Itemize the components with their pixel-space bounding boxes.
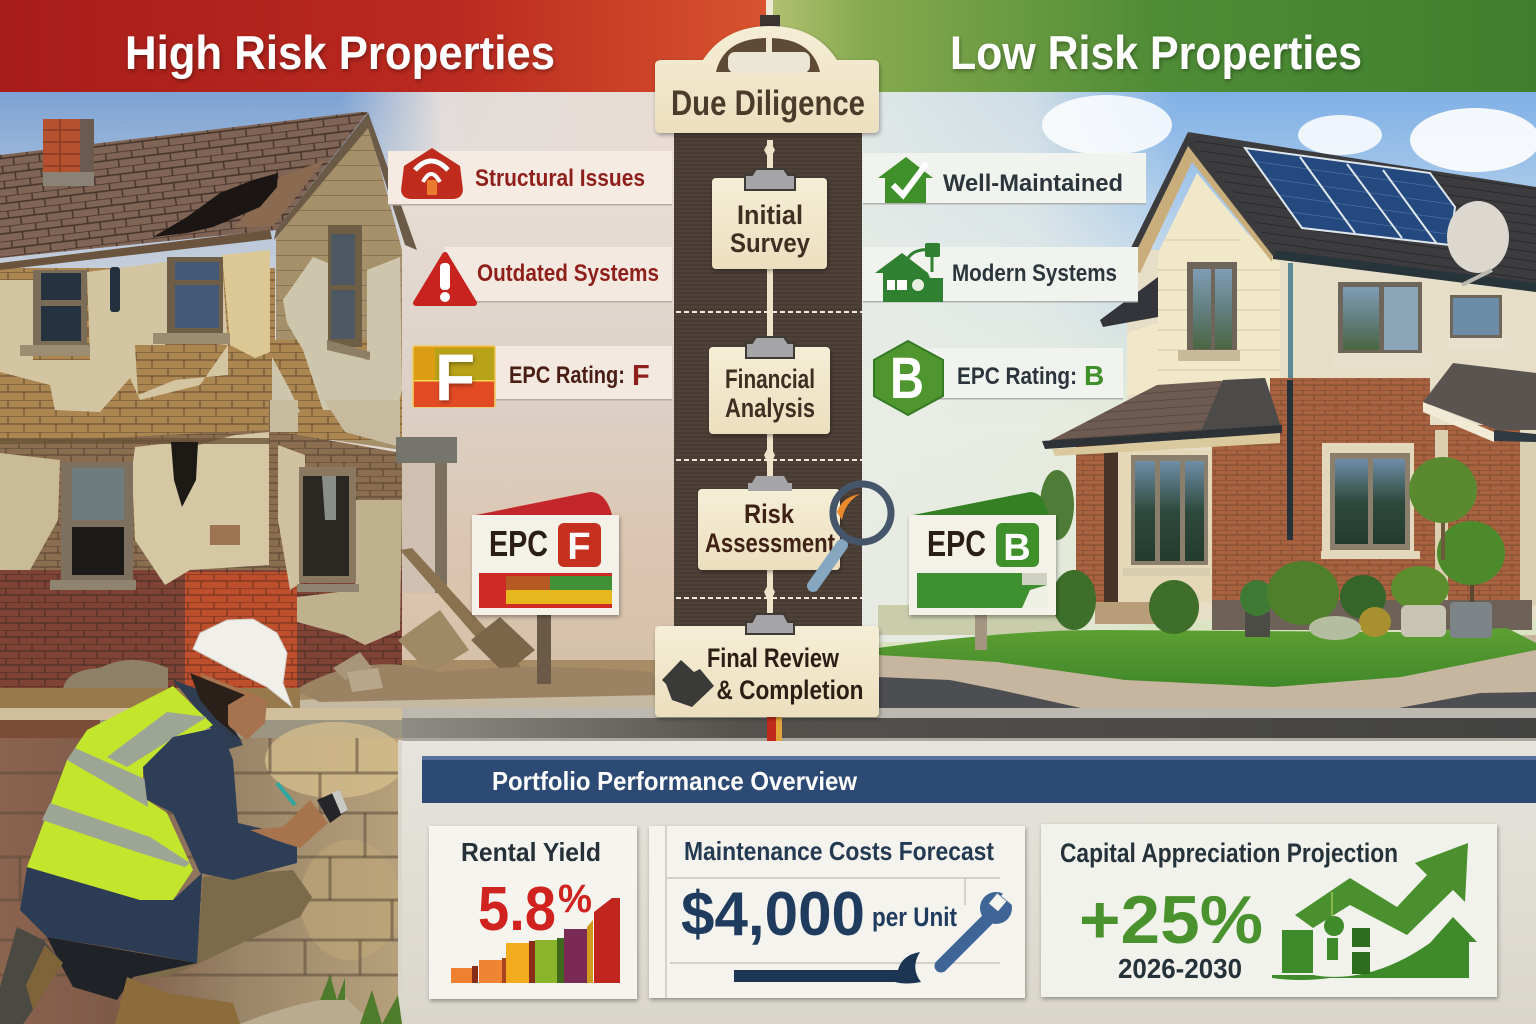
heading bar: Portfolio Performance Overview	[492, 766, 858, 796]
step: final review and completion	[655, 614, 879, 717]
step: risk assessment: Risk	[744, 499, 795, 529]
header: high risk: High Risk Properties	[125, 26, 555, 79]
row: EPC rating F	[413, 340, 672, 414]
background scene	[0, 90, 1536, 730]
sign: EPC B: EPC	[927, 523, 986, 564]
row: well-maintained	[863, 153, 1146, 204]
card: rental yield: Rental Yield	[461, 837, 601, 867]
illustration: inspector with hard hat and tablet	[0, 619, 348, 1024]
top clip and due diligence board: Due Diligence	[671, 84, 865, 123]
icon: handshake	[662, 660, 714, 707]
row: modern systems	[863, 243, 1138, 302]
row: EPC rating B: EPC Rating:	[957, 363, 1077, 390]
card: capital appreciation projection: 2026-2030	[1118, 953, 1242, 984]
row: EPC rating B	[874, 341, 1123, 415]
risk factors: low risk	[863, 153, 1146, 415]
bar chart	[451, 898, 620, 983]
row: outdated systems	[416, 247, 672, 303]
header: high risk	[0, 0, 766, 92]
sign: EPC F: EPC	[489, 523, 548, 564]
step: risk assessment	[698, 476, 840, 570]
header: low risk	[766, 0, 1536, 92]
step: initial survey	[712, 169, 827, 269]
bottom edge road	[0, 708, 1536, 742]
step: final review and completion: & Completion	[716, 675, 864, 705]
row: EPC rating F: EPC Rating:	[509, 362, 625, 389]
heading bar	[422, 756, 1536, 803]
step: initial survey: Initial	[737, 200, 803, 230]
sign: EPC F	[472, 492, 619, 684]
card: rental yield: %	[558, 877, 592, 921]
sign: EPC B: B	[1003, 527, 1031, 569]
row: EPC rating B: B	[890, 346, 924, 411]
top clip and due diligence board	[655, 15, 879, 133]
card: rental yield	[429, 826, 637, 999]
icon: wrench	[734, 885, 1021, 984]
step: financial analysis: Financial	[725, 364, 815, 394]
row: well-maintained: Well-Maintained	[943, 170, 1123, 197]
step: final review and completion: Final Review	[707, 643, 840, 673]
brick wall under worker	[0, 720, 405, 1024]
panel: portfolio performance overview	[402, 741, 1536, 1024]
sign: EPC B	[909, 492, 1056, 650]
icon: house with rising arrow	[1272, 843, 1477, 980]
row: EPC rating B: B	[1084, 360, 1104, 391]
row: EPC rating F: F	[632, 360, 650, 392]
risk factors: high risk	[388, 148, 672, 414]
card: maintenance costs forecast: per Unit	[872, 902, 957, 932]
header: low risk: Low Risk Properties	[950, 26, 1362, 79]
center column: due diligence process	[655, 15, 891, 717]
illustration: well-kept house	[878, 132, 1536, 720]
card: maintenance costs forecast: $4,000	[681, 880, 865, 949]
row: outdated systems: Outdated Systems	[477, 260, 659, 287]
card: capital appreciation projection: Capital Appreciation Projection	[1060, 838, 1398, 868]
step: initial survey: Survey	[730, 228, 810, 258]
card: maintenance costs forecast	[649, 826, 1025, 998]
row: EPC rating F: F	[435, 340, 475, 414]
sign: EPC F: F	[567, 526, 591, 568]
row: structural issues: Structural Issues	[475, 165, 645, 192]
card: capital appreciation projection: +25%	[1079, 882, 1263, 958]
card: maintenance costs forecast: Maintenance Costs Forecast	[684, 836, 994, 866]
icon: magnifying glass	[813, 484, 891, 586]
card: rental yield: 5.8	[478, 875, 556, 944]
step: financial analysis	[709, 337, 830, 434]
row: modern systems: Modern Systems	[952, 260, 1117, 287]
row: structural issues	[388, 148, 672, 206]
step: risk assessment: Assessment	[705, 528, 835, 558]
step: financial analysis: Analysis	[725, 393, 815, 423]
card: capital appreciation projection	[1041, 824, 1497, 997]
illustration: damaged house	[0, 112, 674, 720]
